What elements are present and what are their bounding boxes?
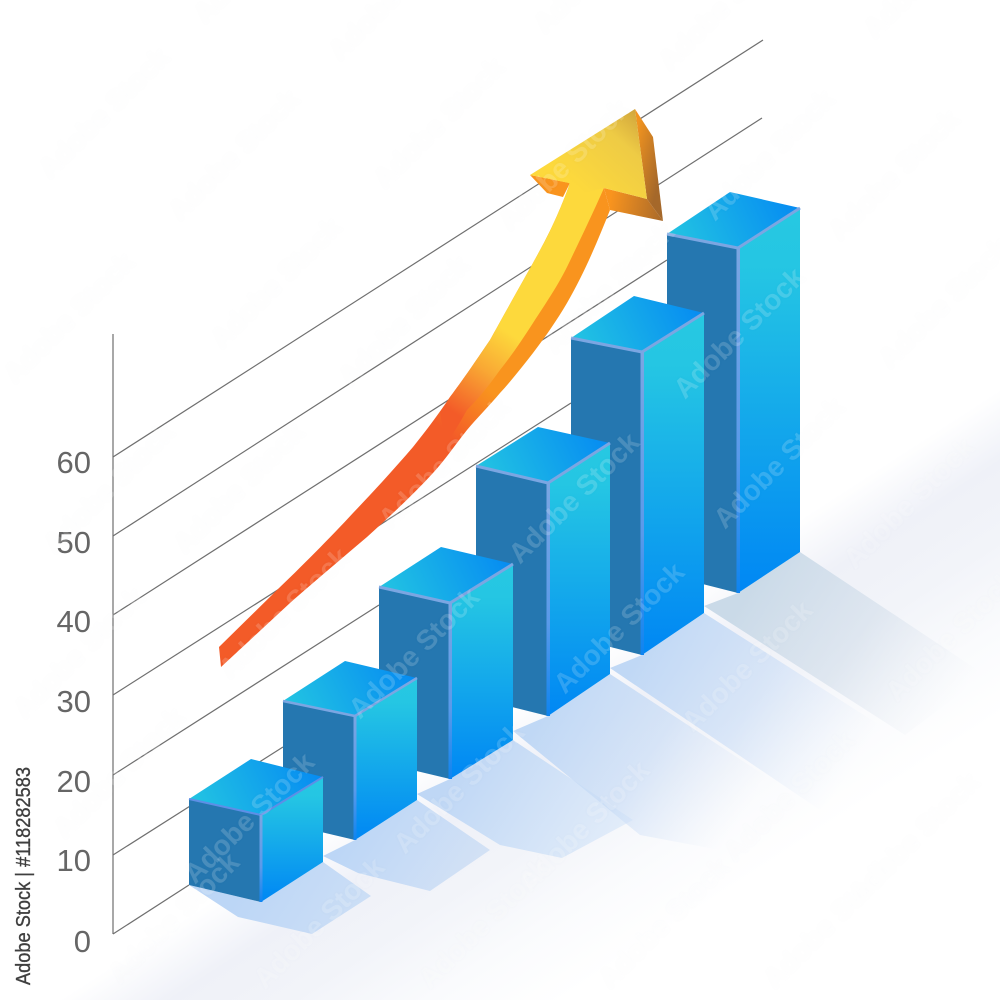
- watermark text: Adobe Stock: [717, 724, 861, 867]
- arrow head left underside: [530, 175, 570, 197]
- axis labels: 30: [57, 684, 91, 719]
- watermark text: Adobe Stock: [707, 391, 851, 534]
- watermark text: Adobe Stock: [697, 83, 841, 226]
- watermark text: Adobe Stock: [204, 211, 348, 354]
- bar shadows: [189, 552, 985, 934]
- watermark text: Adobe Stock: [512, 754, 656, 897]
- watermark text: Adobe Stock: [492, 93, 636, 236]
- arrow shaft silhouette and side: [219, 183, 610, 667]
- rising arrow: [219, 109, 663, 667]
- watermark text: Adobe Stock: [822, 103, 966, 246]
- watermark text: Adobe Stock: [387, 716, 531, 859]
- watermark text: Adobe Stock: [332, 249, 476, 392]
- watermark text: Adobe Stock: [367, 51, 511, 194]
- watermark text: Adobe Stock: [757, 851, 901, 994]
- watermark text: Adobe Stock: [212, 541, 356, 684]
- axis labels: 40: [57, 604, 91, 639]
- watermark text: Adobe Stock: [592, 851, 736, 994]
- watermark text: Adobe Stock: [547, 556, 691, 699]
- axis labels: 20: [57, 764, 91, 799]
- bar 1: [189, 759, 323, 902]
- watermark text: Adobe Stock: [102, 846, 246, 989]
- watermark text: Adobe Stock: [247, 851, 391, 994]
- watermark text: Adobe Stock: [342, 581, 486, 724]
- arrow head right side: [635, 109, 663, 221]
- bar 3: [379, 547, 513, 779]
- axis labels: 50: [57, 525, 91, 560]
- arrow shaft top: [440, 183, 604, 445]
- watermark text: Adobe Stock: [177, 746, 321, 889]
- side credit text: Adobe Stock | #118282583: [13, 767, 35, 985]
- watermark text: Adobe Stock: [7, 581, 151, 724]
- watermark text: Adobe Stock: [502, 426, 646, 569]
- watermark text: Adobe Stock: [675, 594, 819, 737]
- watermark text: Adobe Stock: [167, 416, 311, 559]
- bar 5: [571, 296, 704, 655]
- axis labels: 0: [74, 924, 91, 959]
- watermark text: Adobe Stock: [667, 261, 811, 404]
- watermark text: Adobe Stock: [537, 216, 681, 359]
- bar 4: [476, 427, 610, 716]
- axis and grid lines: [113, 40, 763, 934]
- axis labels: 60: [57, 445, 91, 480]
- bar 6: [667, 192, 800, 593]
- arrow head right underside: [604, 188, 663, 221]
- watermark text: Adobe Stock: [47, 701, 191, 844]
- axis labels: 10: [57, 843, 91, 878]
- watermark text: Adobe Stock: [0, 246, 141, 389]
- watermark text: Adobe Stock: [162, 83, 306, 226]
- arrow head top: [530, 109, 647, 199]
- watermark text: Adobe Stock: [837, 431, 981, 574]
- bar 2: [283, 661, 417, 840]
- watermark text: Adobe Stock: [412, 851, 556, 994]
- watermark text: Adobe Stock: [842, 766, 986, 909]
- axis labels: [57, 445, 91, 959]
- watermark text: Adobe Stock: [32, 41, 176, 184]
- watermark text: Adobe Stock: [372, 391, 516, 534]
- watermark text: Adobe Stock: [37, 416, 181, 559]
